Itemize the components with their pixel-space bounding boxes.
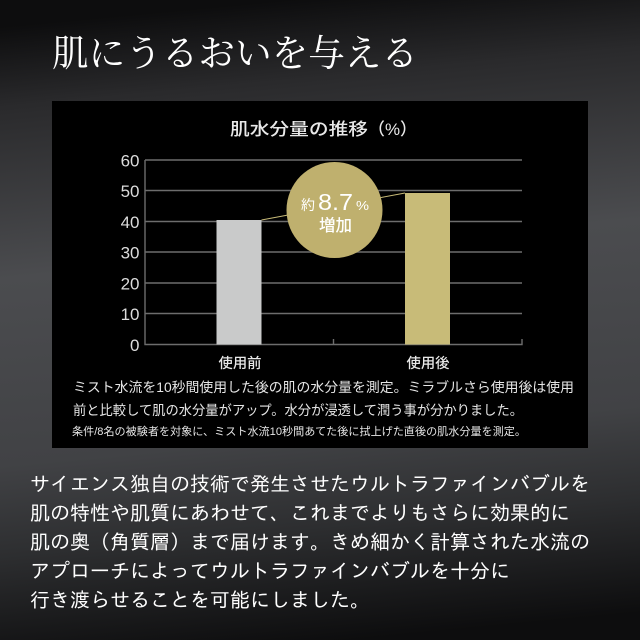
callout: 8.7% increase: 8.7 bbox=[318, 189, 353, 215]
bar: after use bbox=[405, 193, 450, 344]
y axis labels: 60 bbox=[121, 152, 140, 170]
bar chart bbox=[121, 152, 522, 371]
callout: 8.7% increase: 増加 bbox=[319, 216, 352, 235]
y axis labels: 10 bbox=[121, 305, 140, 324]
y axis labels bbox=[121, 152, 140, 355]
x axis labels: 使用前 bbox=[218, 355, 262, 371]
body text: 行き渡らせることを可能にしました。 bbox=[30, 590, 370, 610]
body text: 肌の奥（角質層）まで届けます。きめ細かく計算された水流の bbox=[30, 532, 590, 552]
bar: before use bbox=[216, 220, 262, 344]
body text: 肌の特性や肌質にあわせて、これまでよりもさらに効果的に bbox=[30, 503, 570, 523]
callout: 8.7% increase: % bbox=[356, 198, 369, 213]
connector line bbox=[262, 193, 405, 220]
chart title: 肌水分量の推移 bbox=[230, 120, 368, 139]
grid lines bbox=[145, 160, 522, 344]
y axis labels: 30 bbox=[121, 244, 140, 262]
callout: 8.7% increase: 約 bbox=[301, 197, 315, 213]
title: 肌にうるおいを与える bbox=[52, 23, 418, 77]
chart description: 条件/8名の被験者を対象に、ミスト水流10秒間あてた後に拭上げた直後の肌水分量を測定。 bbox=[72, 424, 526, 438]
body text bbox=[30, 473, 590, 610]
chart title bbox=[230, 120, 417, 139]
chart description: ミスト水流を10秒間使用した後の肌の水分量を測定。ミラブルさら使用後は使用 bbox=[73, 379, 574, 395]
callout: 8.7% increase bbox=[286, 162, 382, 258]
panel: chart bbox=[52, 101, 588, 448]
body text: サイエンス独自の技術で発生させたウルトラファインバブルを bbox=[30, 473, 590, 494]
chart title: （%） bbox=[368, 120, 417, 139]
body text: アプローチによってウルトラファインバブルを十分に bbox=[30, 560, 510, 581]
y axis labels: 0 bbox=[130, 336, 140, 355]
y axis labels: 20 bbox=[121, 274, 140, 294]
y axis labels: 40 bbox=[121, 213, 140, 232]
x axis labels bbox=[218, 355, 450, 371]
chart description bbox=[72, 379, 574, 438]
chart description: 前と比較して肌の水分量がアップ。水分が浸透して潤う事が分かりました。 bbox=[73, 402, 523, 418]
x axis labels: 使用後 bbox=[406, 355, 450, 371]
y axis labels: 50 bbox=[121, 182, 140, 201]
